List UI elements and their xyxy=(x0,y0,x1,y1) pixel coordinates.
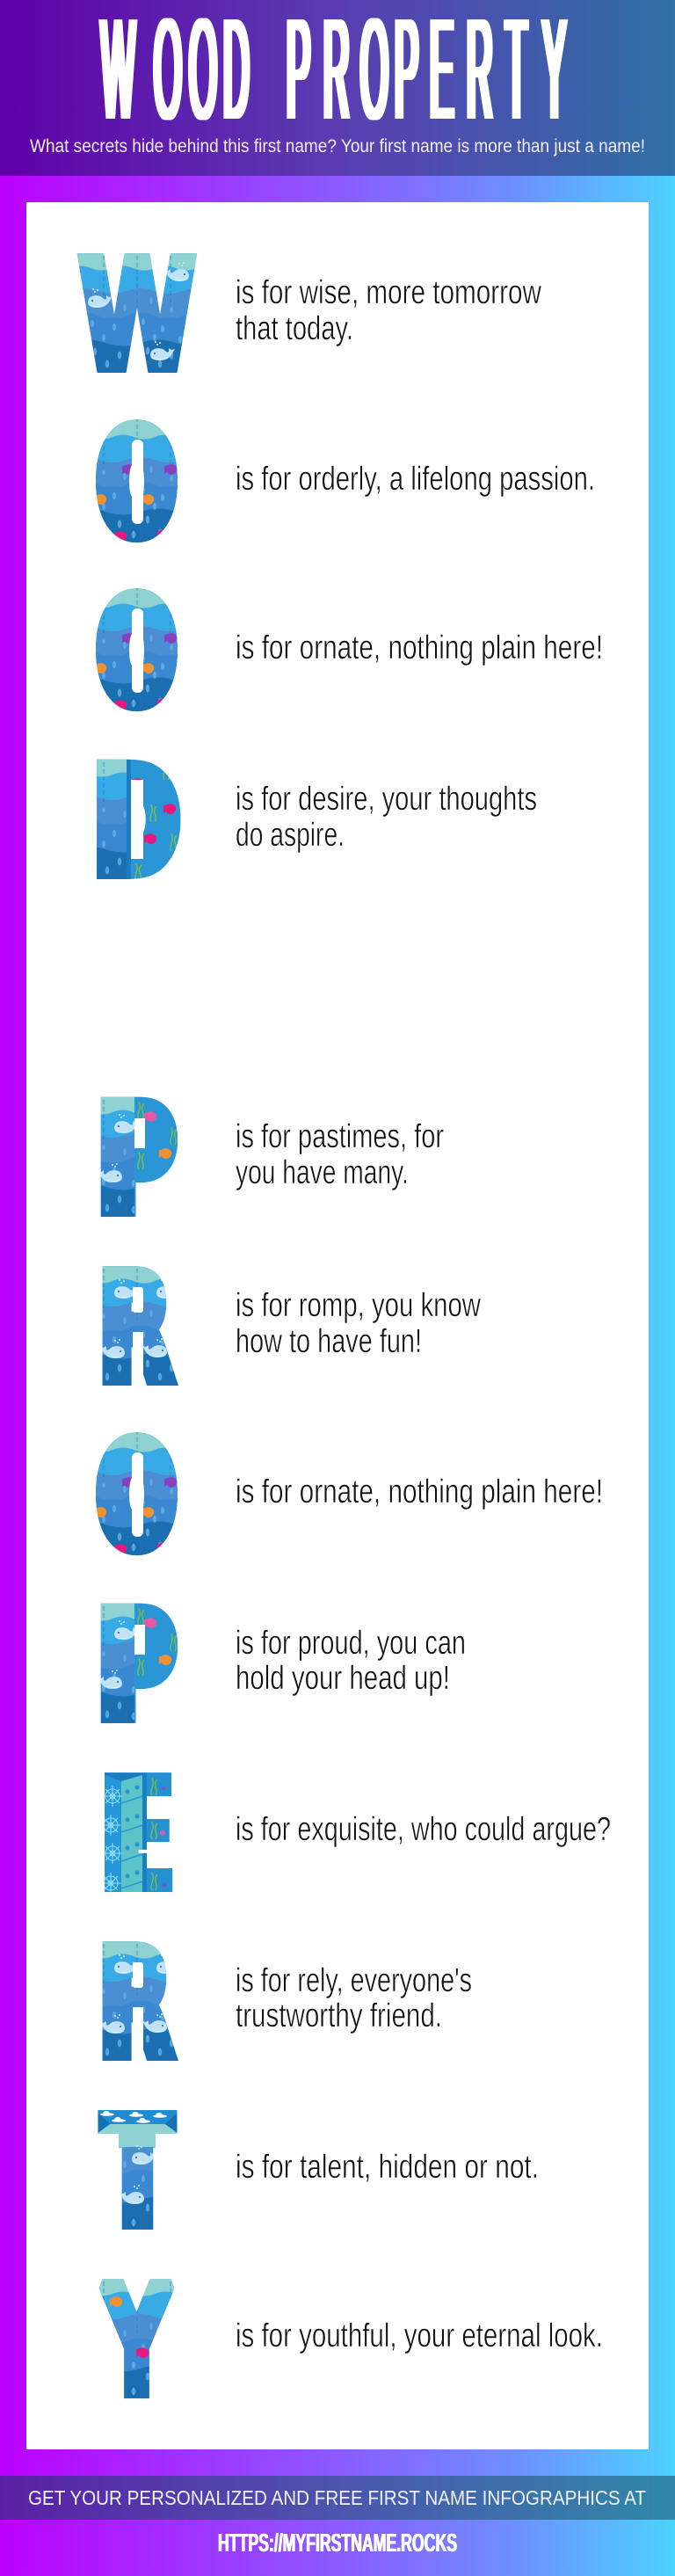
letter P illustration: P xyxy=(99,1082,174,1239)
row: O xyxy=(70,407,595,559)
text: pastimes: you have many. xyxy=(236,1154,409,1191)
letter T illustration: T xyxy=(104,2091,171,2254)
text: romp xyxy=(236,1287,481,1360)
text: wise xyxy=(236,274,541,347)
letter E illustration: E xyxy=(103,1755,172,1915)
letter R illustration xyxy=(102,1266,178,1386)
row: R xyxy=(70,1247,481,1410)
letter T illustration xyxy=(98,2110,178,2230)
letter O illustration: O xyxy=(99,576,174,728)
letter Y illustration xyxy=(98,2279,174,2398)
letter R illustration: R xyxy=(100,1922,171,2085)
text: proud: is for proud, you can xyxy=(236,1625,466,1662)
row: D xyxy=(97,760,536,879)
row: W xyxy=(70,229,541,403)
text: pastimes: is for pastimes, for xyxy=(236,1118,444,1155)
row: O second xyxy=(70,576,603,728)
text: rely xyxy=(236,1962,472,2034)
row: Y xyxy=(98,2279,600,2398)
row: R second xyxy=(70,1922,472,2085)
text: rely: is for rely, everyone's xyxy=(236,1962,472,1999)
letter W illustration xyxy=(77,253,197,373)
footer url: HTTPS://MYFIRSTNAME.ROCKS xyxy=(218,2529,457,2558)
letter O illustration: O xyxy=(99,1420,174,1572)
text: rely: trustworthy friend. xyxy=(236,1997,442,2034)
text: pastimes xyxy=(236,1118,444,1191)
letter W illustration: W xyxy=(78,229,196,403)
text: romp: is for romp, you know xyxy=(236,1287,481,1324)
row: E xyxy=(70,1755,611,1915)
text: talent: is for talent, hidden or not. xyxy=(236,2149,539,2186)
letter R illustration: R xyxy=(100,1247,171,1410)
letter R illustration xyxy=(102,1941,178,2061)
text: desire: is for desire, your thoughts xyxy=(236,781,537,818)
row: P xyxy=(70,1082,444,1239)
text: desire: do aspire. xyxy=(236,817,345,854)
row: T xyxy=(70,2091,539,2254)
text: romp: how to have fun! xyxy=(236,1323,422,1360)
header banner xyxy=(0,0,675,176)
text: wise: is for wise, more tomorrow xyxy=(236,274,541,311)
letter O illustration: O xyxy=(99,407,174,559)
text: desire xyxy=(236,781,537,854)
row: O third xyxy=(70,1420,603,1572)
letter P illustration: P xyxy=(99,1589,174,1745)
text: wise: that today. xyxy=(236,310,353,347)
row: P second xyxy=(70,1589,466,1745)
text: proud: hold your head up! xyxy=(236,1660,450,1697)
letter D illustration: D xyxy=(96,744,178,900)
text: proud xyxy=(236,1625,466,1697)
footer band xyxy=(0,2476,675,2520)
letter Y illustration: Y xyxy=(102,2255,171,2427)
